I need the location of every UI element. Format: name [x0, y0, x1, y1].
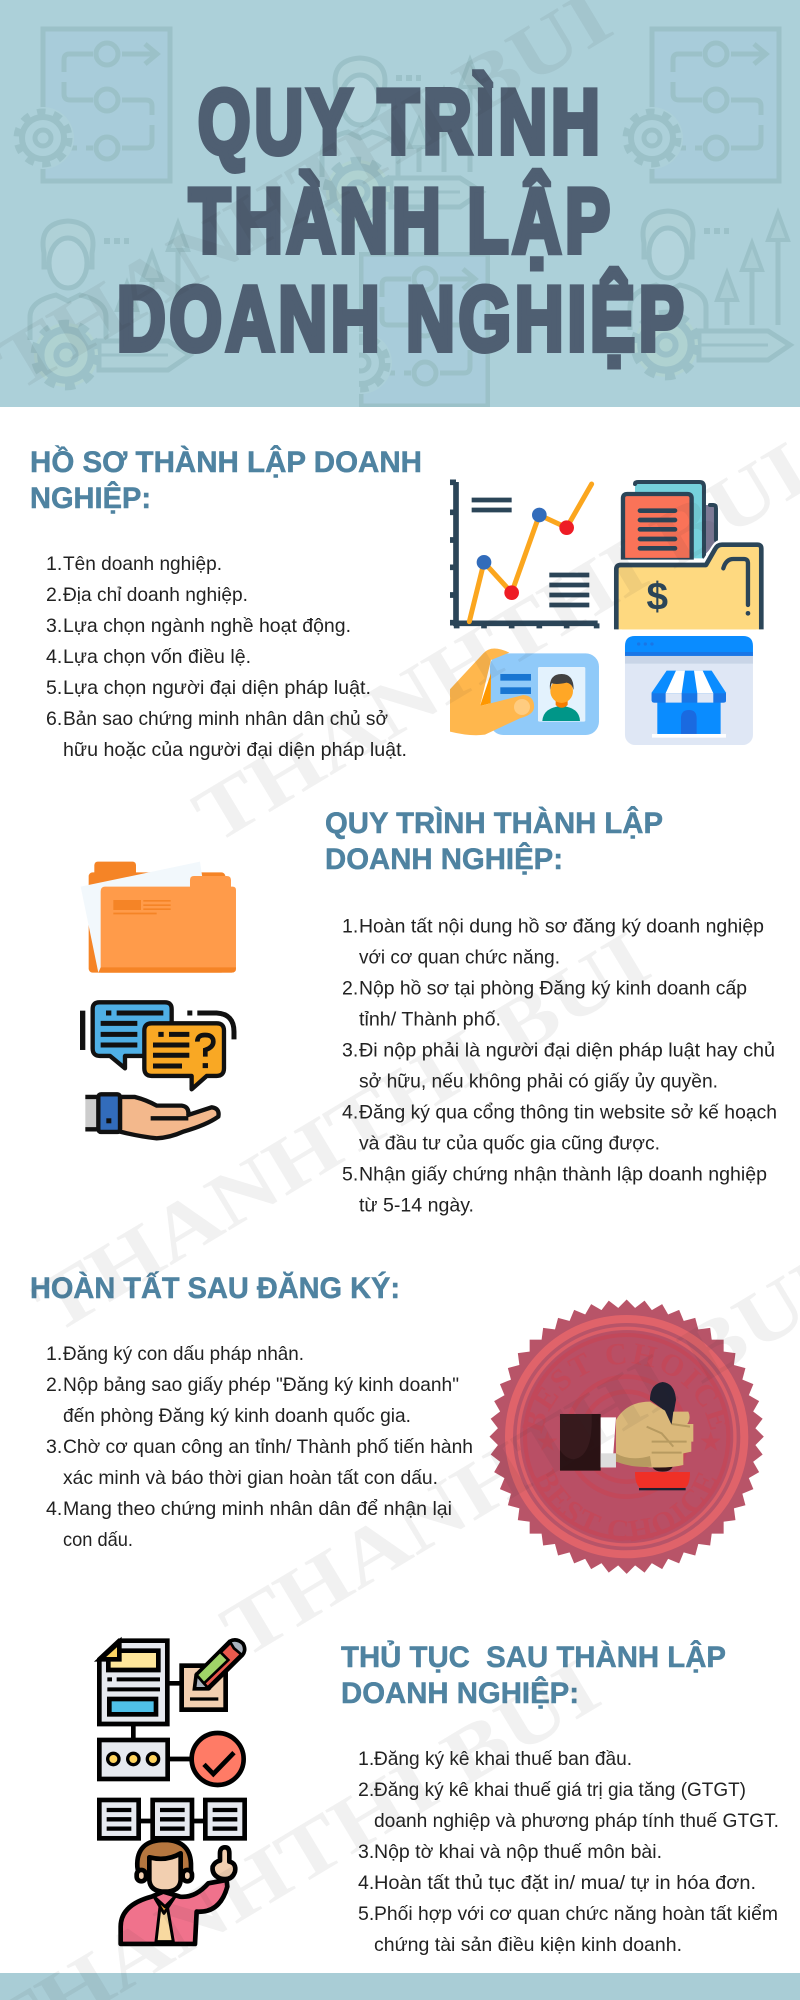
- section 3 list: 1.: [46, 1343, 62, 1365]
- person: [121, 1840, 235, 1944]
- section 2 list: Đi nộp phải là người đại diện pháp luật hay chủ: [359, 1040, 775, 1062]
- icon: seal with stamping hand: [490, 1300, 764, 1574]
- section 3 list: 3.: [46, 1436, 62, 1458]
- section 3 list: Chờ cơ quan công an tỉnh/ Thành phố tiến hành: [63, 1436, 473, 1458]
- section 4 list: chứng tài sản điều kiện kinh doanh.: [374, 1934, 682, 1956]
- section 4 list: doanh nghiệp và phương pháp tính thuế GTGT.: [374, 1810, 779, 1832]
- section 1 list: 4.: [46, 646, 62, 668]
- section 3 list: 4.: [46, 1498, 62, 1520]
- title: [117, 71, 684, 369]
- seal badge: ★: [535, 1427, 559, 1458]
- section 1 list: 3.: [46, 615, 62, 637]
- section 4 list: 2.: [358, 1779, 374, 1801]
- section 3 list: 2.: [46, 1374, 62, 1396]
- section 1 list: Bản sao chứng minh nhân dân chủ sở: [63, 708, 388, 730]
- section 1 list: Địa chỉ doanh nghiệp.: [63, 584, 248, 606]
- section 3 list: [46, 1343, 473, 1551]
- section 2 list: Đăng ký qua cổng thông tin website sở kế hoạch: [359, 1102, 777, 1124]
- section 2 list: Hoàn tất nội dung hồ sơ đăng ký doanh nghiệp: [359, 916, 764, 938]
- seal badge: [490, 1300, 764, 1574]
- seal badge: BEST CHOICE: [536, 1468, 716, 1541]
- section 1 list: 2.: [46, 584, 62, 606]
- section 3 list: đến phòng Đăng ký kinh doanh quốc gia.: [63, 1405, 411, 1427]
- section 1 heading: HỒ SƠ THÀNH LẬP DOANH: [30, 445, 422, 479]
- section 2 list: từ 5-14 ngày.: [359, 1194, 474, 1216]
- section 4 list: Nộp tờ khai và nộp thuế môn bài.: [374, 1841, 662, 1863]
- icon: open hand: [85, 1094, 219, 1138]
- three forms: [99, 1800, 245, 1838]
- title: THÀNH LẬP: [189, 170, 610, 271]
- section 2 list: [342, 916, 777, 1216]
- icon: procedure flow with person: [99, 1640, 245, 1944]
- section 1 list: [46, 553, 407, 761]
- section 1 list: 5.: [46, 677, 62, 699]
- section 4 heading: THỦ TỤC SAU THÀNH LẬP: [341, 1640, 726, 1674]
- section 3 heading: HOÀN TẤT SAU ĐĂNG KÝ:: [30, 1271, 400, 1305]
- seal badge: ★: [699, 1427, 723, 1458]
- section 4 heading: DOANH NGHIỆP:: [341, 1676, 579, 1710]
- section 4 list: 4.: [358, 1872, 374, 1894]
- section 3 list: Nộp bảng sao giấy phép "Đăng ký kinh doanh": [63, 1374, 459, 1396]
- section 1 list: 1.: [46, 553, 62, 575]
- check mark: [192, 1733, 244, 1785]
- section 2 list: 5.: [342, 1164, 358, 1186]
- section 4 list: 1.: [358, 1748, 374, 1770]
- section 2 list: với cơ quan chức năng.: [359, 946, 560, 968]
- section 4 list: [358, 1748, 779, 1956]
- note and pencil: [182, 1640, 244, 1710]
- section 2 heading: QUY TRÌNH THÀNH LẬP: [325, 806, 663, 840]
- section 1 list: Lựa chọn vốn điều lệ.: [63, 646, 251, 668]
- section 1 heading: [30, 445, 422, 515]
- watermark: THANHTHI BUI: [179, 425, 800, 860]
- section 2 list: tỉnh/ Thành phố.: [359, 1008, 501, 1030]
- footer band: [0, 1973, 800, 2000]
- section 1 list: Lựa chọn ngành nghề hoạt động.: [63, 615, 351, 637]
- icon: line chart: [450, 482, 598, 628]
- section 1 list: hữu hoặc của người đại diện pháp luật.: [63, 739, 407, 761]
- background icons: [12, 29, 790, 406]
- icon: orange folder: [81, 862, 236, 973]
- section 4 heading: [341, 1640, 726, 1710]
- section 3 list: Mang theo chứng minh nhân dân để nhận lại: [63, 1498, 452, 1520]
- section 1 list: Tên doanh nghiệp.: [63, 553, 222, 575]
- section 4 list: Phối hợp với cơ quan chức năng hoàn tất kiểm: [374, 1903, 778, 1925]
- title: DOANH NGHIỆP: [117, 268, 684, 369]
- section 2 list: 2.: [342, 978, 358, 1000]
- section 2 heading: [325, 806, 663, 876]
- section 1 list: Lựa chọn người đại diện pháp luật.: [63, 677, 371, 699]
- section 1 list: 6.: [46, 708, 62, 730]
- seal badge: BEST CHOICE: [522, 1344, 725, 1434]
- icon: chat bubbles: [83, 1002, 234, 1089]
- section 2 heading: DOANH NGHIỆP:: [325, 842, 563, 876]
- section 4 list: Hoàn tất thủ tục đặt in/ mua/ tự in hóa đơn.: [374, 1872, 756, 1894]
- icon: online store: [625, 636, 753, 745]
- icon: money folder: [616, 482, 761, 629]
- status box: [99, 1740, 168, 1779]
- section 3 list: xác minh và báo thời gian hoàn tất con dấu.: [63, 1467, 438, 1489]
- section 4 list: 3.: [358, 1841, 374, 1863]
- section 2 list: Nhận giấy chứng nhận thành lập doanh nghiệp: [359, 1164, 767, 1186]
- section 4 list: Đăng ký kê khai thuế ban đầu.: [374, 1748, 632, 1770]
- section 3 list: con dấu.: [63, 1529, 133, 1551]
- section 2 list: 1.: [342, 916, 358, 938]
- watermark: THANHTHI BUI: [19, 915, 664, 1350]
- stamping hand: [560, 1382, 693, 1490]
- icon: money folder: $: [647, 575, 668, 618]
- section 2 list: sở hữu, nếu không phải có giấy ủy quyền.: [359, 1070, 718, 1092]
- title: QUY TRÌNH: [198, 71, 600, 172]
- section 2 list: 3.: [342, 1040, 358, 1062]
- header panel: [0, 0, 800, 407]
- watermark: THANHTHI BUI: [207, 1240, 800, 1675]
- section 4 list: 5.: [358, 1903, 374, 1925]
- section 2 list: và đầu tư của quốc gia cũng được.: [359, 1132, 660, 1154]
- icon: id card: [450, 648, 599, 735]
- section 1 heading: NGHIỆP:: [30, 481, 151, 515]
- section 4 list: Đăng ký kê khai thuế giá trị gia tăng (GTGT): [374, 1779, 746, 1801]
- section 3 list: Đăng ký con dấu pháp nhân.: [63, 1343, 304, 1365]
- section 2 list: Nộp hồ sơ tại phòng Đăng ký kinh doanh cấp: [359, 978, 747, 1000]
- document: [99, 1641, 205, 1821]
- section 2 list: 4.: [342, 1102, 358, 1124]
